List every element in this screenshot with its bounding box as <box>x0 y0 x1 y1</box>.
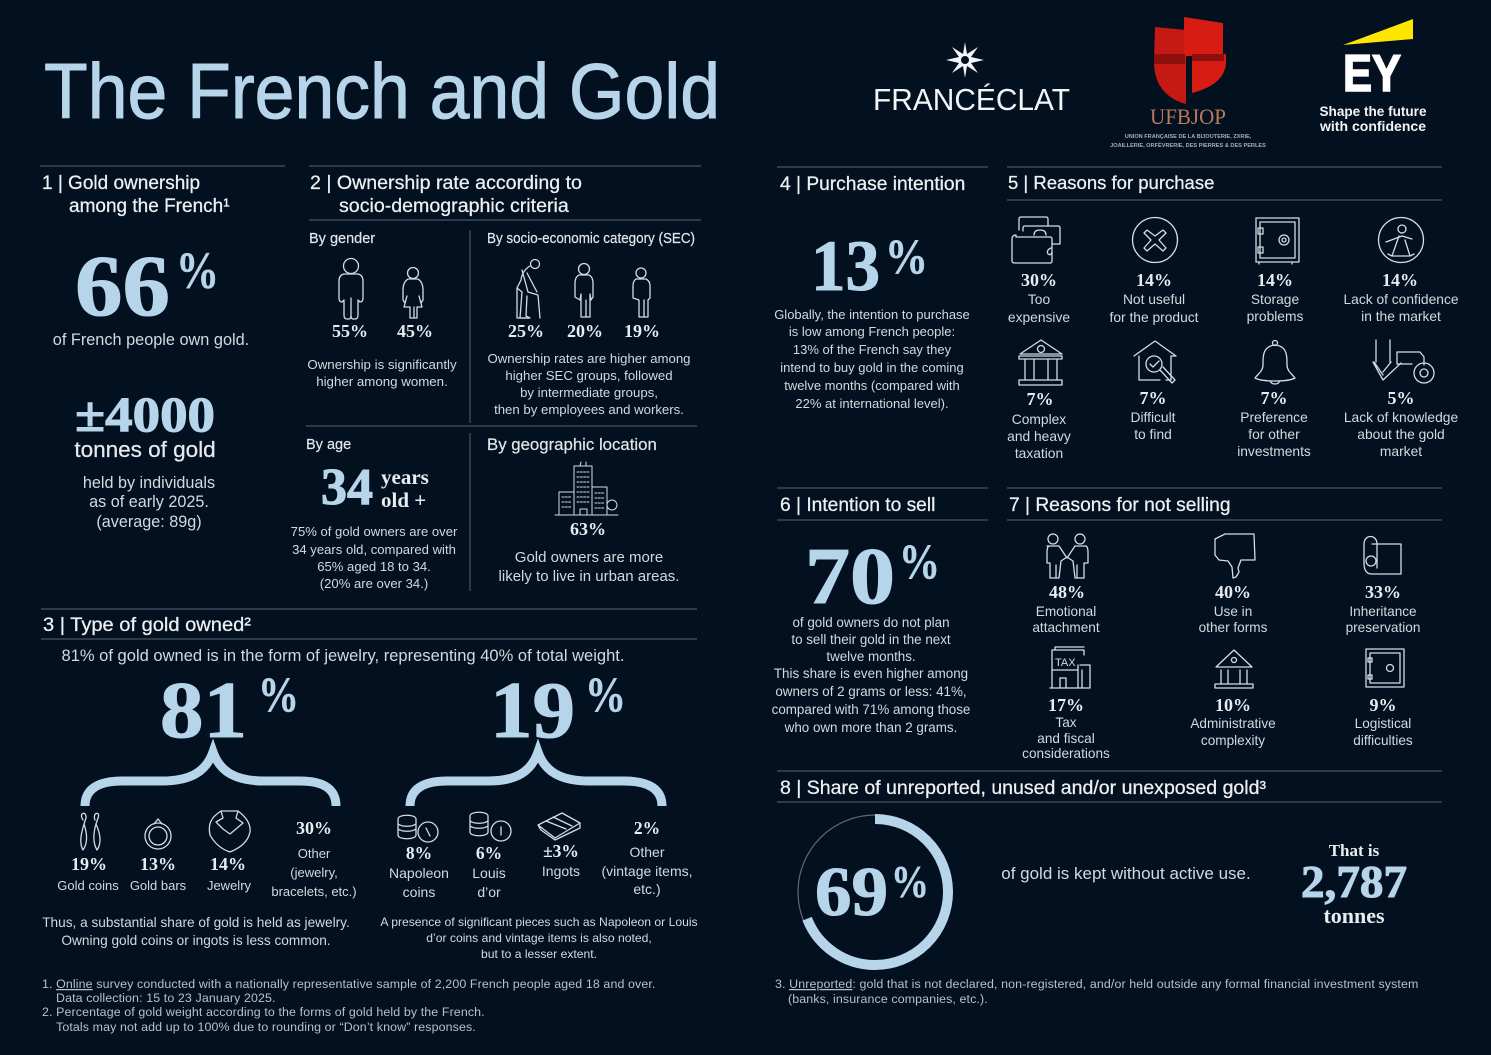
panel: reasons for purchase: 14% <box>1257 270 1293 290</box>
icon: bank <box>1215 650 1253 688</box>
panel: ownership rate: Ownership is significantly <box>307 357 457 372</box>
icon: buildings <box>555 462 618 515</box>
icon: tools <box>1373 340 1434 383</box>
panel: reasons for not selling: 10% <box>1215 695 1251 715</box>
panel: reasons for purchase: problems <box>1247 309 1303 324</box>
donut chart: 69% <box>798 815 952 969</box>
panel: ownership rate: By gender <box>309 231 375 247</box>
panel: ownership rate: By socio-economic category (SEC) <box>487 231 695 247</box>
panel: reasons for not selling: preservation <box>1346 620 1420 635</box>
panel: reasons for purchase: Not useful <box>1123 292 1185 307</box>
panel: ownership rate: then by employees and workers. <box>494 402 684 417</box>
panel: intention to sell: % <box>899 533 940 589</box>
panel: gold ownership: 66 <box>75 237 170 334</box>
title: The French and Gold <box>44 47 720 135</box>
panel: ownership rate: higher SEC groups, followed <box>505 368 673 383</box>
panel: reasons for purchase: and heavy <box>1007 429 1071 444</box>
panel: type of gold owned: Louis <box>472 865 506 881</box>
panel: reasons for not selling: Use in <box>1214 604 1252 619</box>
panel: ownership rate: Gold owners are more <box>515 549 663 566</box>
icon: wallet <box>1012 217 1060 263</box>
panel: reasons for purchase: Lack of knowledge <box>1344 410 1458 425</box>
panel: type of gold owned: 30% <box>296 818 332 838</box>
panel: reasons for purchase: 5 | Reasons for purchase <box>1008 172 1214 193</box>
panel: intention to sell: compared with 71% among those <box>772 702 970 717</box>
panel: type of gold owned: Napoleon <box>389 865 449 881</box>
panel: reasons for purchase: Complex <box>1012 412 1066 427</box>
panel: purchase intention: % <box>885 228 928 284</box>
panel: intention to sell: 6 | Intention to sell <box>780 495 935 516</box>
panel: purchase intention: 13% of the French say they <box>793 342 952 357</box>
panel: reasons for not selling: other forms <box>1199 620 1268 635</box>
panel: ownership rate: 34 years old, compared with <box>292 542 456 557</box>
icon: trader circle <box>1378 218 1424 262</box>
panel: unreported gold <box>780 778 1407 969</box>
panel: gold ownership: (average: 89g) <box>96 513 202 531</box>
panel: reasons for not selling: and fiscal <box>1037 731 1095 746</box>
panel: gold ownership: held by individuals <box>83 474 215 492</box>
panel: reasons for purchase: in the market <box>1361 309 1441 324</box>
icon: man <box>339 258 363 319</box>
panel: type of gold owned: but to a lesser extent. <box>481 947 597 961</box>
panel: type of gold owned: 6% <box>476 843 502 863</box>
icon: woman <box>403 268 423 318</box>
panel: ownership rate: 63% <box>570 519 606 539</box>
panel: type of gold owned: etc.) <box>633 881 661 897</box>
panel: gold ownership: ±4000 <box>75 386 215 442</box>
icon: tax <box>1050 647 1090 688</box>
logo: EY: EY <box>1343 45 1401 103</box>
panel: reasons for purchase <box>1007 172 1459 461</box>
icon: safe <box>1256 218 1299 264</box>
panel: type of gold owned: A presence of significant pieces such as Napoleon or Louis <box>380 915 698 929</box>
panel: ownership rate: socio-demographic criteria <box>339 195 569 217</box>
panel: type of gold owned <box>42 615 698 961</box>
panel: ownership rate: higher among women. <box>316 374 448 389</box>
icon: safe <box>1366 649 1404 687</box>
brace: jewelry <box>85 752 336 806</box>
footnotes 1 and 2: Data collection: 15 to 23 January 2025. <box>56 991 276 1005</box>
panel: reasons for purchase: 5% <box>1388 388 1414 408</box>
panel: reasons for not selling: 9% <box>1370 695 1396 715</box>
panel: type of gold owned: Owning gold coins or ingots is less common. <box>61 933 331 948</box>
icon: elder <box>517 260 540 318</box>
panel: type of gold owned: Gold bars <box>130 878 187 893</box>
panel: reasons for purchase: Difficult <box>1131 410 1176 425</box>
panel: reasons for not selling: 17% <box>1048 695 1084 715</box>
panel: purchase intention: twelve months (compared with <box>784 378 960 393</box>
panel: ownership rate: 25% <box>508 321 544 341</box>
brace: coins and ingots <box>410 752 662 806</box>
panel: ownership rate: 2 | Ownership rate according to <box>310 172 582 194</box>
panel: reasons for purchase: 7% <box>1260 388 1288 408</box>
logo: EY: Shape the future <box>1320 103 1427 119</box>
panel: purchase intention: is low among French people: <box>789 324 955 339</box>
panel: gold ownership: as of early 2025. <box>89 493 209 511</box>
panel: reasons for not selling: Administrative <box>1190 716 1276 731</box>
logo: Francéclat: FRANCÉCLAT <box>873 82 1070 117</box>
panel: unreported gold: 8 | Share of unreported, unused and/or unexposed gold³ <box>780 778 1267 799</box>
panel: reasons for not selling: Logistical <box>1355 716 1411 731</box>
panel: purchase intention: Globally, the intention to purchase <box>774 307 970 322</box>
panel: type of gold owned: Thus, a substantial share of gold is held as jewelry. <box>42 915 350 930</box>
panel: reasons for not selling: Inheritance <box>1349 604 1417 619</box>
panel: type of gold owned: 13% <box>140 854 176 874</box>
panel: type of gold owned: 81 <box>160 667 247 755</box>
panel: ownership rate: likely to live in urban areas. <box>499 568 679 585</box>
panel: purchase intention <box>774 174 970 411</box>
panel: intention to sell: This share is even higher among <box>774 666 968 681</box>
panel: ownership rate: 34 <box>321 459 373 516</box>
footnotes 1 and 2: 1. <box>42 977 56 991</box>
panel: ownership rate: old + <box>381 488 426 512</box>
panel: reasons for purchase: Preference <box>1240 410 1308 425</box>
panel: gold ownership: % <box>176 243 219 300</box>
panel: type of gold owned: 8% <box>406 843 432 863</box>
panel: reasons for not selling: attachment <box>1032 620 1100 635</box>
panel: reasons for not selling: difficulties <box>1353 733 1413 748</box>
panel: purchase intention: intend to buy gold in the coming <box>780 360 964 375</box>
panel: type of gold owned: 14% <box>210 854 246 874</box>
icon: Napoleon coins <box>398 815 438 842</box>
panel: type of gold owned: % <box>585 666 626 722</box>
panel: reasons for not selling: 33% <box>1365 582 1401 602</box>
logo: UFBJOP: UFBJOP <box>1150 104 1226 129</box>
panel: reasons for not selling: considerations <box>1022 746 1110 761</box>
panel: reasons for purchase: 7% <box>1026 389 1054 409</box>
panel: purchase intention: 22% at international level). <box>795 396 949 411</box>
panel: ownership rate: 75% of gold owners are over <box>291 524 458 539</box>
panel: ownership rate: 19% <box>624 321 660 341</box>
panel: ownership rate <box>291 172 695 591</box>
panel: reasons for purchase: taxation <box>1015 446 1063 461</box>
panel: reasons for not selling: Emotional <box>1036 604 1096 619</box>
panel: type of gold owned: (vintage items, <box>601 863 693 879</box>
panel: reasons for purchase: 14% <box>1136 270 1172 290</box>
panel: reasons for purchase: 14% <box>1382 270 1418 290</box>
footnote 3: (banks, insurance companies, etc.). <box>788 992 988 1006</box>
panel: ownership rate: 45% <box>397 321 433 341</box>
panel: type of gold owned: Gold coins <box>57 878 119 893</box>
panel: type of gold owned: (jewelry, <box>290 865 338 880</box>
icon: tax: TAX <box>1055 657 1076 669</box>
icon: necklace <box>209 811 250 852</box>
footnotes 1 and 2: Online survey conducted with a nationally representative sample of 2,200 French people aged 18 and over. <box>56 977 656 991</box>
panel: reasons for purchase: market <box>1380 444 1422 459</box>
panel: reasons for purchase: Too <box>1028 292 1050 307</box>
panel: type of gold owned: Other <box>629 844 665 860</box>
panel: reasons for not selling: 40% <box>1215 582 1251 602</box>
panel: unreported gold: of gold is kept without active use. <box>1001 864 1251 883</box>
panel: reasons for purchase: to find <box>1134 427 1172 442</box>
panel: type of gold owned: d’or <box>477 884 501 900</box>
panel: reasons for purchase: 7% <box>1140 388 1166 408</box>
icon: bank <box>1019 340 1062 385</box>
icon: Louis d'or <box>470 812 511 841</box>
logo: EY <box>1319 19 1427 134</box>
panel: reasons for purchase: expensive <box>1008 310 1070 325</box>
panel: reasons for not selling <box>1009 495 1420 761</box>
footnotes 1 and 2: Totals may not add up to 100% due to rounding or “Don’t know” responses. <box>56 1020 476 1034</box>
panel: purchase intention: 13 <box>811 226 880 306</box>
panel: type of gold owned: ±3% <box>543 841 579 861</box>
footnote 3: 3. <box>775 977 789 991</box>
icon: ring <box>145 819 171 849</box>
panel: unreported gold: 69 <box>815 854 888 931</box>
panel: reasons for purchase: for other <box>1248 427 1300 442</box>
panel: type of gold owned: 19% <box>71 854 107 874</box>
logo: Francéclat <box>873 42 1070 117</box>
panel: type of gold owned: bracelets, etc.) <box>271 884 357 899</box>
icon: earrings <box>81 813 100 850</box>
panel: reasons for purchase: about the gold <box>1357 427 1445 442</box>
panel: intention to sell <box>772 495 970 735</box>
panel: reasons for purchase: Storage <box>1251 292 1299 307</box>
icon: house search <box>1134 341 1176 383</box>
panel: type of gold owned: 81% of gold owned is in the form of jewelry, representing 40% of total weight. <box>62 646 624 665</box>
icon: person <box>633 268 650 317</box>
panel: type of gold owned: 2% <box>634 818 660 838</box>
panel: gold ownership <box>42 173 249 531</box>
panel: ownership rate: by intermediate groups, <box>520 385 658 400</box>
panel: reasons for purchase: 30% <box>1021 270 1057 290</box>
panel: reasons for not selling: 48% <box>1049 582 1085 602</box>
panel: ownership rate: 20% <box>567 321 603 341</box>
panel: reasons for purchase: for the product <box>1110 310 1199 325</box>
logo: UFBJOP: JOAILLERIE, ORFÈVRERIE, DES PIERRES & DES PERLES <box>1110 141 1266 149</box>
panel: ownership rate: 65% aged 18 to 34. <box>317 559 431 574</box>
panel: intention to sell: 70 <box>805 531 895 621</box>
panel: intention to sell: owners of 2 grams or less: 41%, <box>775 684 967 699</box>
panel: type of gold owned: coins <box>403 884 435 900</box>
panel: gold ownership: of French people own gold. <box>53 331 249 349</box>
icon: bell <box>1255 340 1295 384</box>
icon: scroll <box>1364 536 1401 574</box>
panel: gold ownership: 1 | Gold ownership <box>42 173 200 194</box>
panel: intention to sell: who own more than 2 grams. <box>784 720 957 735</box>
panel: reasons for not selling: Tax <box>1055 715 1077 730</box>
footnote 3: Unreported: gold that is not declared, non-registered, and/or held outside any formal financial investment system <box>789 977 1418 991</box>
panel: unreported gold: 2,787 <box>1301 856 1407 907</box>
panel: reasons for purchase: investments <box>1237 444 1311 459</box>
panel: type of gold owned: 19 <box>490 667 575 755</box>
panel: type of gold owned: d’or coins and vintage items is also noted, <box>426 931 652 945</box>
panel: ownership rate: By geographic location <box>487 435 657 454</box>
panel: ownership rate: 55% <box>332 321 368 341</box>
icon: couple <box>1047 534 1088 578</box>
icon: ingots <box>538 813 580 840</box>
panel: type of gold owned: % <box>258 666 299 722</box>
panel: purchase intention: 4 | Purchase intention <box>780 174 965 195</box>
panel: reasons for not selling: 7 | Reasons for not selling <box>1009 495 1230 516</box>
panel: intention to sell: to sell their gold in the next <box>791 632 951 647</box>
icon: thumbs down <box>1215 534 1255 578</box>
panel: ownership rate: By age <box>306 437 351 453</box>
panel: intention to sell: of gold owners do not plan <box>792 615 950 630</box>
logo: UFBJOP <box>1110 17 1266 149</box>
icon: person <box>575 264 593 317</box>
panel: type of gold owned: Ingots <box>542 863 580 879</box>
logo: EY: with confidence <box>1319 118 1426 134</box>
footnotes 1 and 2: 2. Percentage of gold weight according to the forms of gold held by the French. <box>42 1005 485 1019</box>
panel: gold ownership: tonnes of gold <box>74 437 216 462</box>
panel: type of gold owned: 3 | Type of gold owned² <box>43 615 252 636</box>
icon: cross circle <box>1132 218 1178 262</box>
panel: unreported gold: That is <box>1329 841 1380 860</box>
panel: ownership rate: years <box>381 465 429 489</box>
panel: unreported gold: tonnes <box>1323 903 1385 928</box>
panel: unreported gold: % <box>891 856 929 907</box>
panel: ownership rate: Ownership rates are higher among <box>487 351 691 366</box>
panel: type of gold owned: Jewelry <box>207 878 252 893</box>
logo: UFBJOP: UNION FRANÇAISE DE LA BIJOUTERIE, ZXRIE, <box>1125 134 1252 140</box>
panel: reasons for purchase: Lack of confidence <box>1343 292 1459 307</box>
panel: intention to sell: twelve months. <box>826 649 916 664</box>
panel: reasons for not selling: complexity <box>1201 733 1265 748</box>
panel: gold ownership: among the French¹ <box>69 196 230 217</box>
panel: ownership rate: (20% are over 34.) <box>320 576 428 591</box>
panel: type of gold owned: Other <box>298 846 331 861</box>
